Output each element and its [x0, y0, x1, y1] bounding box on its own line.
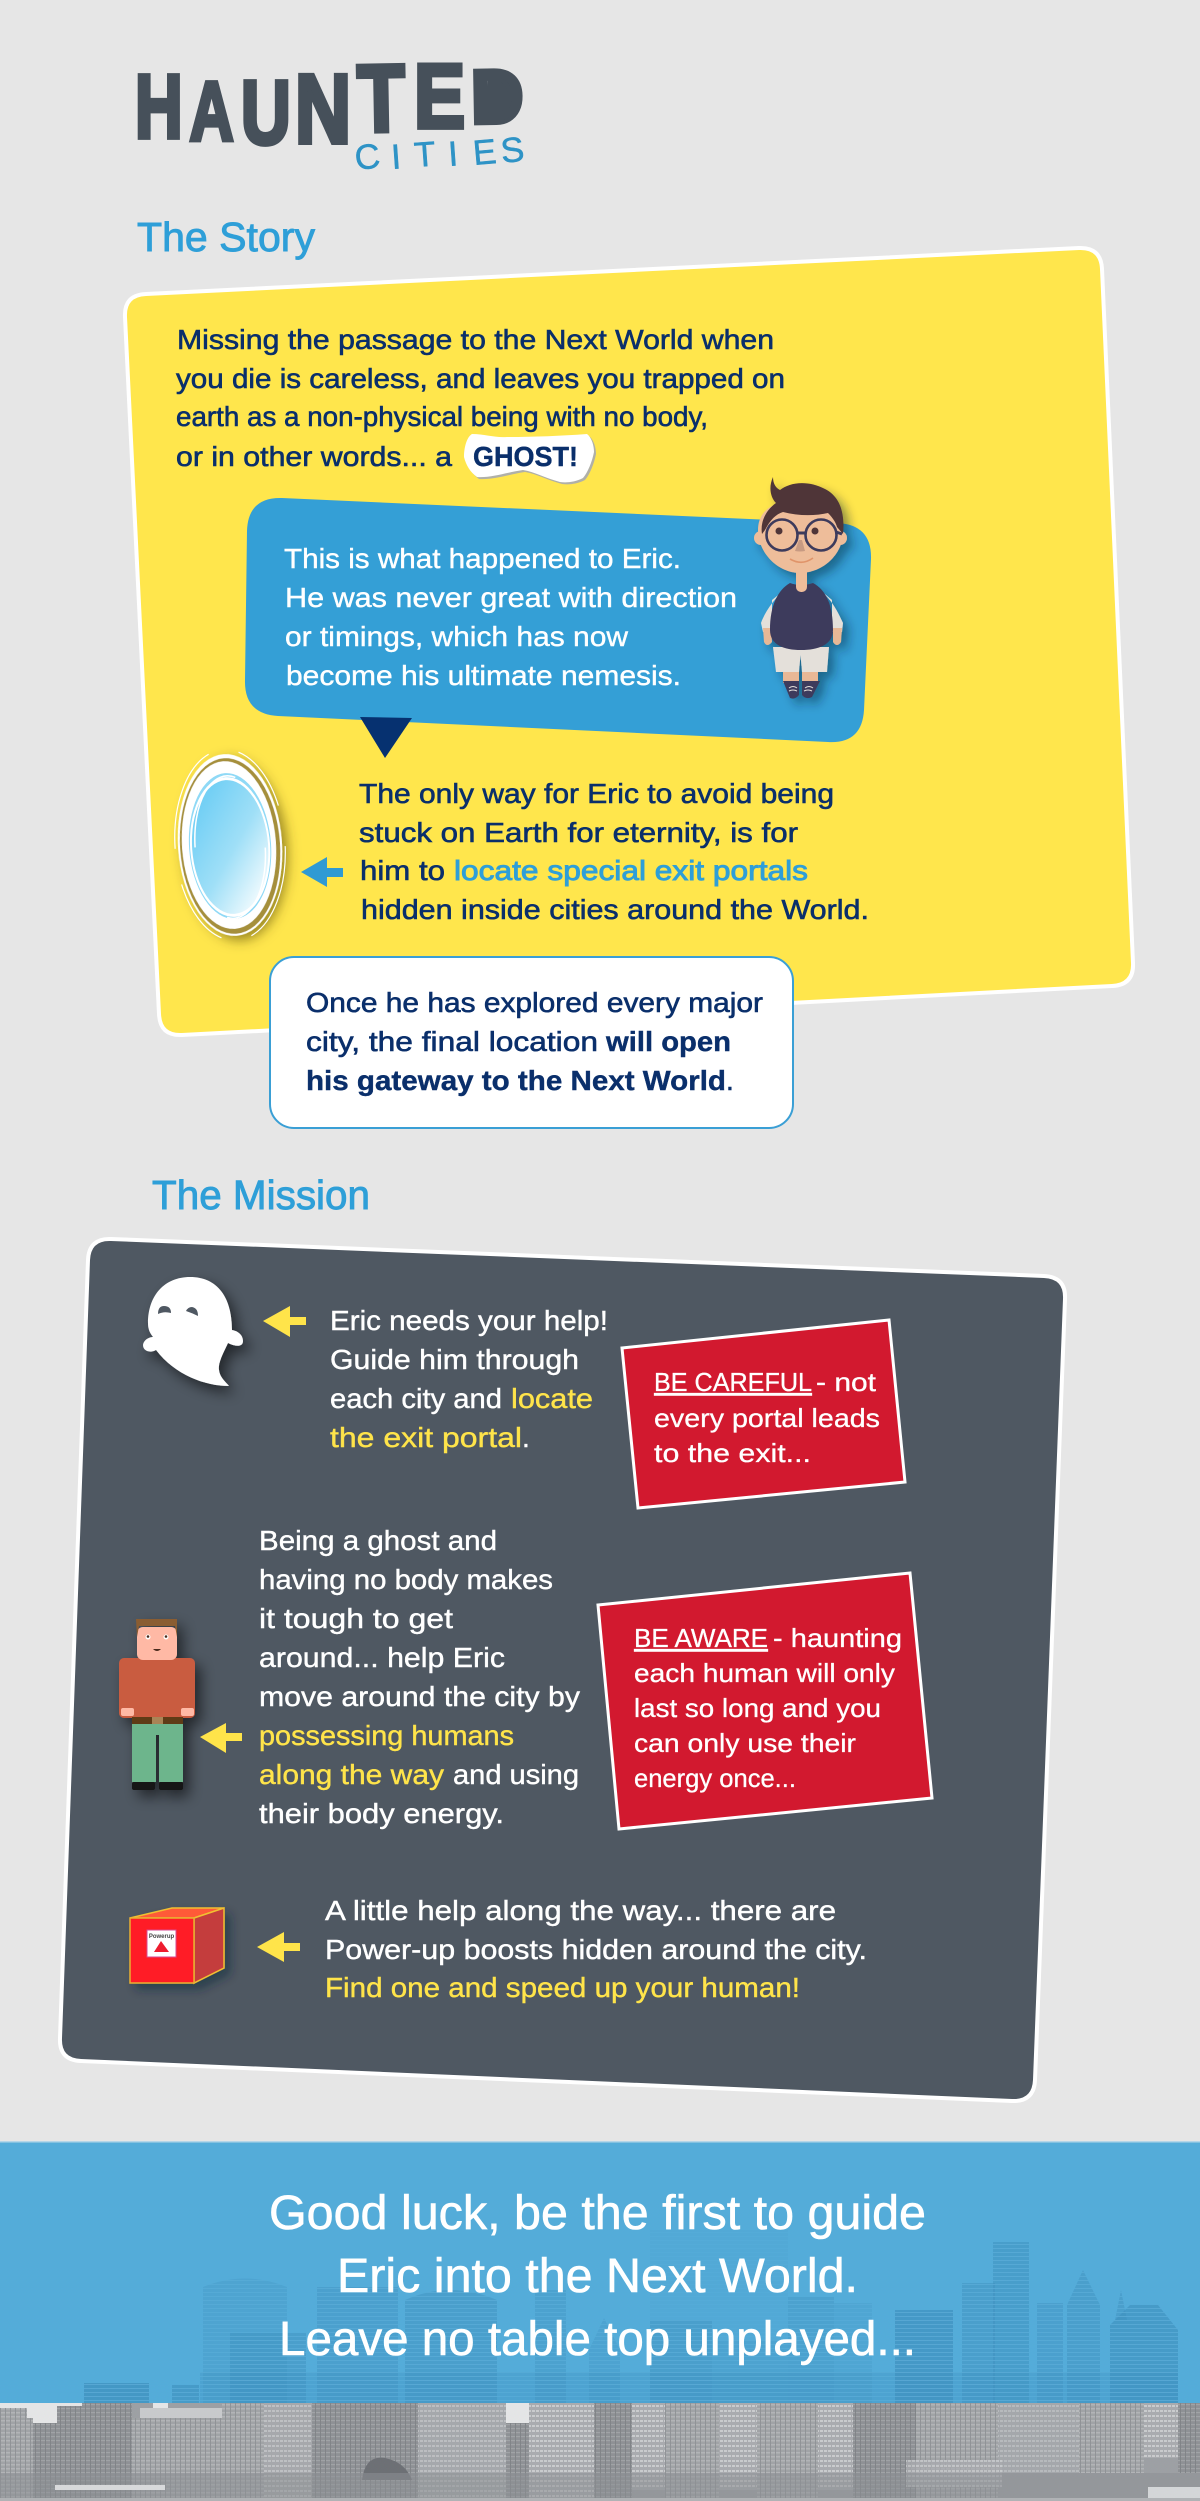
- icon: power-up box: Powerup: [149, 1934, 174, 1940]
- arrow: yellow to ghost: [263, 1306, 306, 1337]
- text: Eric needs your help: each city and: [330, 1383, 502, 1414]
- text: possessing humans: Being a ghost and: [259, 1525, 497, 1556]
- intro text: Missing the passage to the Next World when: [177, 324, 774, 355]
- callout: be careful: to the exit...: [654, 1438, 811, 1468]
- callout: be aware: energy once...: [634, 1763, 796, 1793]
- callout: be aware: [598, 1573, 932, 1829]
- portal text: The only way for Eric to avoid being: [359, 778, 834, 809]
- blue speech bubble: [245, 498, 871, 758]
- callout: final location: city, the final location: [306, 1026, 598, 1057]
- closing message: Eric into the Next World.: [337, 2250, 858, 2303]
- arrow: blue pointing at portal: [301, 857, 343, 887]
- callout: be careful: every portal leads: [654, 1403, 880, 1433]
- callout: final location: his gateway to the Next World: [306, 1065, 726, 1096]
- dark mission card: [60, 1239, 1065, 2101]
- callout: be careful: BE CAREFUL: [654, 1367, 812, 1397]
- callout: be aware: can only use their: [634, 1728, 856, 1758]
- heading: The Story: The Story: [137, 214, 315, 260]
- logo: Haunted Cities: A: [190, 64, 234, 159]
- callout: be aware: each human will only: [634, 1658, 895, 1688]
- logo: Haunted Cities: E: [414, 45, 465, 147]
- callout: be aware: last so long and you: [634, 1693, 881, 1723]
- arrow: yellow to box: [257, 1932, 300, 1962]
- text: Eric needs your help: Guide him through: [330, 1344, 579, 1375]
- callout: final location: .: [726, 1065, 734, 1096]
- callout: final location: [270, 957, 793, 1128]
- logo: Haunted Cities: S: [499, 130, 526, 171]
- blue speech bubble: This is what happened to Eric.: [284, 543, 681, 574]
- grey city photo strip: [0, 2403, 1200, 2501]
- intro text: you die is careless, and leaves you trapped on: [176, 363, 785, 394]
- callout: be aware: - haunting: [773, 1623, 902, 1653]
- closing message: Good luck, be the first to guide: [269, 2187, 926, 2240]
- portal text: hidden inside cities around the World.: [361, 894, 869, 925]
- text: power-up boosts: Find one and speed up your human!: [325, 1972, 800, 2003]
- icon: power-up box: [130, 1908, 224, 1983]
- logo: Haunted Cities: N: [295, 54, 351, 163]
- text: Eric needs your help: [330, 1305, 608, 1453]
- text: possessing humans: [259, 1525, 580, 1829]
- text: possessing humans: and using: [453, 1759, 579, 1790]
- arrow: yellow to human: [200, 1723, 242, 1753]
- closing message: [269, 2187, 926, 2366]
- text: possessing humans: around... help Eric: [259, 1642, 505, 1673]
- ghost word blob: GHOST!: [473, 441, 578, 472]
- text: possessing humans: their body energy.: [259, 1798, 504, 1829]
- callout: be aware: BE AWARE: [634, 1623, 768, 1653]
- panel: the mission: [60, 1239, 1065, 2101]
- blue banner: [0, 2142, 1200, 2403]
- callout: final location: Once he has explored every major: [306, 987, 763, 1018]
- text: Eric needs your help: .: [522, 1422, 530, 1453]
- text: possessing humans: move around the city by: [259, 1681, 580, 1712]
- logo: Haunted Cities: I: [447, 134, 459, 174]
- closing message: Leave no table top unplayed...: [279, 2313, 916, 2366]
- callout: be careful: - not: [816, 1367, 877, 1397]
- text: possessing humans: having no body makes: [259, 1564, 553, 1595]
- logo: Haunted Cities: T: [413, 135, 437, 175]
- panel: the story: [125, 248, 1133, 1128]
- icon: exit portal: [169, 749, 291, 941]
- intro text: earth as a non-physical being with no body,: [176, 401, 708, 432]
- text: possessing humans: along the way: [259, 1759, 444, 1790]
- portal text: stuck on Earth for eternity, is for: [359, 817, 798, 848]
- text: power-up boosts: Power-up boosts hidden around the city.: [325, 1934, 867, 1965]
- icon: Eric character: [754, 477, 847, 699]
- text: Eric needs your help: locate: [511, 1383, 593, 1414]
- logo: Haunted Cities: I: [390, 137, 402, 177]
- icon: human: [119, 1619, 195, 1790]
- intro text: [176, 324, 785, 472]
- blue speech bubble: become his ultimate nemesis.: [286, 660, 681, 691]
- intro text: or in other words... a: [176, 441, 452, 472]
- logo: Haunted Cities: D: [470, 53, 525, 140]
- logo: Haunted Cities: [135, 45, 526, 178]
- portal text: locate special exit portals: [454, 855, 808, 886]
- text: Eric needs your help: the exit portal: [330, 1422, 522, 1453]
- text: possessing humans: possessing humans: [259, 1720, 514, 1751]
- blue speech bubble: or timings, which has now: [285, 621, 629, 652]
- portal text: [359, 778, 869, 925]
- callout: final location: will open: [605, 1026, 731, 1057]
- heading: The Mission: The Mission: [152, 1172, 370, 1218]
- callout: be careful: [622, 1320, 905, 1508]
- logo: Haunted Cities: C: [353, 137, 382, 178]
- logo: Haunted Cities: T: [357, 45, 406, 152]
- ghost word blob: [464, 434, 596, 484]
- logo: Haunted Cities: E: [471, 132, 498, 173]
- text: power-up boosts: [325, 1895, 867, 2003]
- text: possessing humans: it tough to get: [259, 1603, 453, 1634]
- portal text: him to: [360, 855, 445, 886]
- logo: Haunted Cities: H: [135, 55, 183, 157]
- skyline silhouette in banner: [84, 2230, 1178, 2403]
- text: power-up boosts: A little help along the way... there are: [325, 1895, 836, 1926]
- yellow story card: [125, 248, 1133, 1035]
- footer banner with city skyline: [0, 2141, 1200, 2501]
- logo: Haunted Cities: U: [241, 63, 291, 164]
- icon: ghost: [143, 1277, 243, 1386]
- text: Eric needs your help: Eric needs your help!: [330, 1305, 608, 1336]
- blue speech bubble: He was never great with direction: [285, 582, 737, 613]
